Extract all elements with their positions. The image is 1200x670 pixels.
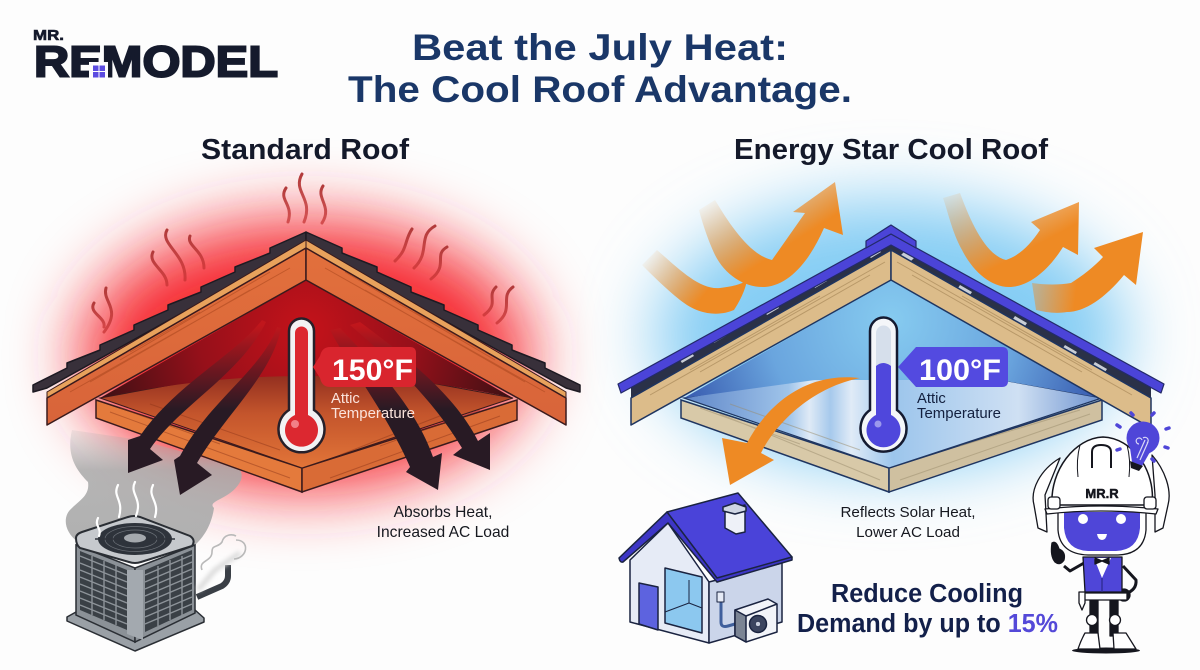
AC fan bbox=[95, 523, 175, 555]
logo: Mr. Remodel: MR. bbox=[33, 28, 64, 44]
badge: 150F bbox=[313, 347, 416, 387]
title: The Cool Roof Advantage. bbox=[348, 69, 852, 110]
vest bbox=[1083, 557, 1122, 592]
shadow bbox=[1072, 648, 1140, 654]
shingles left bbox=[33, 232, 306, 392]
house right wall bbox=[709, 563, 782, 643]
label: absorbs heat: Increased AC Load bbox=[377, 524, 509, 541]
door bbox=[639, 583, 658, 630]
AC left side bbox=[76, 545, 135, 642]
tool belt bbox=[1080, 593, 1127, 600]
glow: red heat behind standard roof bbox=[80, 220, 530, 490]
outdoor AC bbox=[735, 599, 777, 642]
dark heat arrows going down bbox=[128, 320, 490, 495]
attic floor bbox=[681, 360, 1102, 492]
right rafter bbox=[306, 240, 566, 425]
dark underlayment bbox=[631, 238, 1151, 398]
house with AC bbox=[619, 493, 792, 643]
label: attic temperature hot: Attic bbox=[331, 391, 360, 407]
label: attic temperature cool: Temperature bbox=[917, 406, 1001, 422]
badge: 150F: 150°F bbox=[332, 354, 413, 387]
heat waves rising from standard roof bbox=[93, 174, 513, 332]
earmuffs bbox=[1033, 458, 1060, 532]
bow tie bbox=[1095, 558, 1109, 564]
call to action: reduce cooling demand: Demand by up to 15% bbox=[797, 610, 1058, 638]
ridge cap bbox=[866, 225, 916, 248]
AC base bbox=[67, 610, 204, 651]
shingles right bbox=[306, 232, 580, 392]
badge: 100F: 100°F bbox=[919, 354, 1001, 387]
call to action: reduce cooling demand: Reduce Cooling bbox=[831, 580, 1023, 608]
house left wall bbox=[630, 523, 709, 643]
logo: Mr. Remodel: REMODEL bbox=[34, 38, 278, 86]
right rafter bbox=[891, 250, 1151, 428]
attic dark interior bbox=[100, 280, 513, 398]
orange arrow into house bbox=[722, 377, 860, 485]
mascot: Mr. R robot: MR.R bbox=[1085, 486, 1119, 501]
thermometer: 150F bbox=[278, 318, 325, 452]
left arm and hand bbox=[1064, 563, 1084, 571]
heading: Energy Star Cool Roof: Energy Star Cool Roof bbox=[734, 134, 1049, 166]
thermometer: 100F bbox=[860, 318, 907, 452]
head bbox=[1058, 508, 1146, 555]
AC white heat lines bbox=[97, 482, 156, 536]
right arm and glove bbox=[1123, 566, 1136, 594]
smoke cloud over AC bbox=[66, 430, 242, 545]
heading: Standard Roof: Standard Roof bbox=[201, 134, 410, 166]
attic blue interior bbox=[684, 280, 1102, 398]
title: Beat the July Heat: bbox=[412, 27, 788, 68]
attic floor bbox=[96, 360, 517, 492]
icon: light bulb idea bbox=[1117, 413, 1169, 471]
label: absorbs heat: Absorbs Heat, bbox=[394, 504, 492, 521]
blue reflective roof strip bbox=[618, 234, 1164, 393]
glow: blue cool behind cool roof bbox=[655, 200, 1125, 470]
AC top bbox=[76, 516, 194, 563]
orange sun swooshes reflecting off cool roof bbox=[642, 182, 1143, 314]
roof bbox=[667, 493, 792, 582]
wall conduit bbox=[721, 592, 735, 626]
face bbox=[1064, 512, 1140, 551]
boots bbox=[1078, 633, 1100, 649]
window bbox=[665, 568, 702, 633]
cool roof cross-section bbox=[618, 225, 1164, 492]
standard roof cross-section bbox=[33, 232, 580, 492]
call to action: reduce cooling demand bbox=[797, 580, 1058, 638]
left rafter bbox=[631, 250, 891, 425]
mascot: Mr. R robot bbox=[1033, 437, 1169, 654]
air conditioner unit, overheating bbox=[67, 482, 246, 651]
title bbox=[348, 27, 852, 110]
chimney bbox=[725, 505, 745, 534]
badge: 100F bbox=[898, 347, 1008, 387]
legs bbox=[1090, 600, 1118, 636]
label: attic temperature hot: Temperature bbox=[331, 406, 415, 422]
label: reflects heat: Reflects Solar Heat, bbox=[840, 504, 976, 521]
label: attic temperature cool: Attic bbox=[917, 391, 946, 407]
label: reflects heat: Lower AC Load bbox=[856, 524, 960, 541]
AC right side bbox=[135, 545, 195, 642]
helmet bbox=[1052, 437, 1152, 505]
left rafter bbox=[47, 240, 306, 425]
AC pipe with steam bbox=[197, 535, 246, 597]
